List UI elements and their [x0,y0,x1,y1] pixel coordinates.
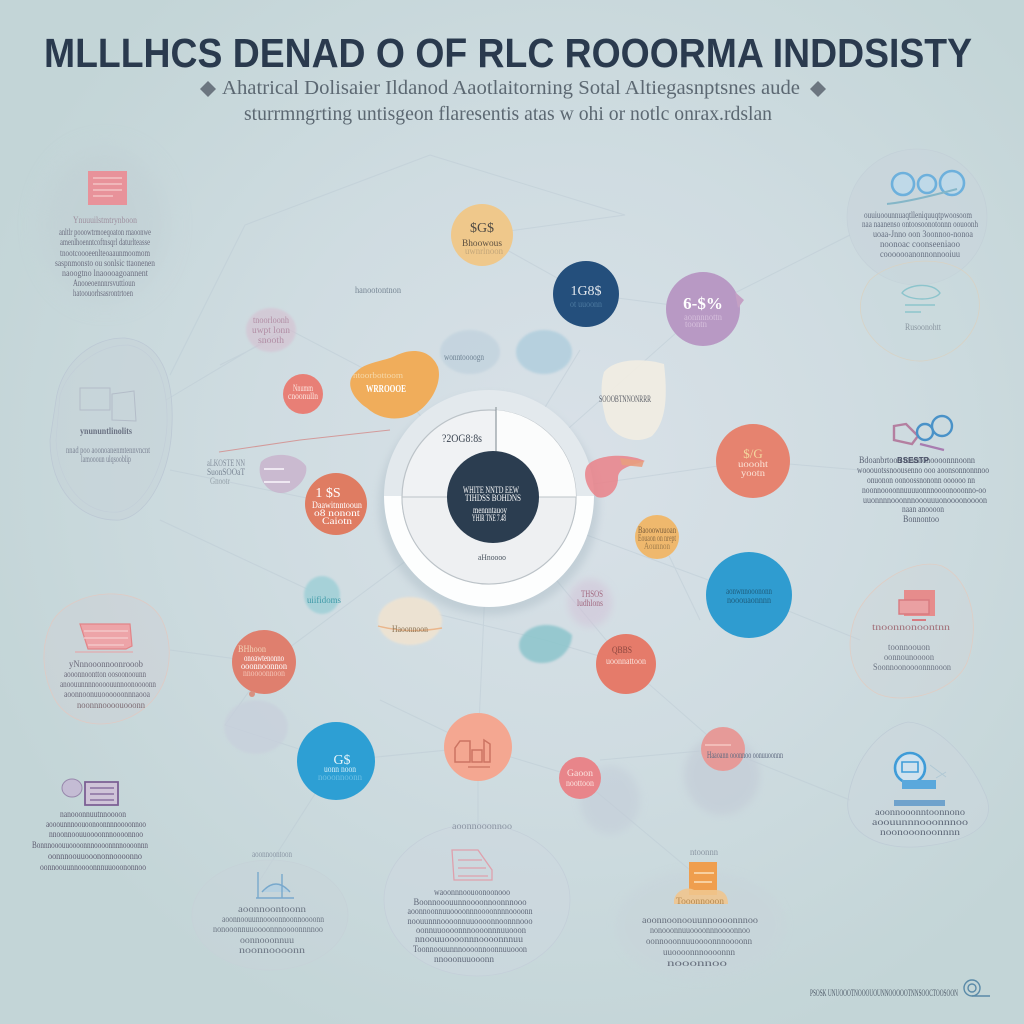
node: yellow circle: Aounnon [644,541,670,551]
node: peach circle: Bhoowous [462,238,503,248]
node: teal pale blob [304,576,341,614]
node: rose circle lower with shadow blob [684,727,783,815]
panel text: lamoooun ulqsooblip [81,454,131,464]
panel text: cooooooanonnonnooiuu [880,249,960,259]
donut inner ring [402,410,576,584]
node: blue circle right: aonwnnooononn [726,586,772,596]
panel text: Tooonnooon [676,896,725,906]
panel text: Soonnoonoooonnnooon [873,662,951,672]
icon: teal sketch [902,285,940,312]
node: yellow circle: Baooowuuoan [638,525,676,535]
panel text: anoouunnnnoooouunnoonoooonn [60,679,156,689]
panel text: Boonnooouunnoooonnoonnnooo [414,897,527,907]
node: pale blue notes near top [355,285,572,374]
panel text [642,896,759,968]
node: coral circle left: o8 nonont [314,508,361,518]
node: blue circle lower: G$ [333,753,351,768]
panel text: noouunnnoooonnuuoooonnoonnnooo [408,916,533,926]
node: purple circle: aonnnnottn [684,312,722,322]
panel: right bottom bubble [848,722,988,847]
icon: blue chat [895,753,946,789]
panel text [213,904,324,955]
node: pale pink note [246,308,296,352]
panel text: noonnoooonnuuuuonnnoooonooonno-oo [862,485,986,495]
node: coral circle right: $/G [743,446,763,461]
panel text [862,210,978,259]
panel: right notes: BSESTP [897,456,930,465]
panel: lower left bubble [44,594,169,724]
node: coral circle lower left: nnoooonnoon [243,668,285,678]
node: coral circle right: uoooht [738,459,769,469]
icon: red document [88,171,127,205]
node: pale blue notes near top: hanootontnon [355,285,401,295]
panel text: noonooonoonnnn [880,827,961,837]
chart: central donut: WHITE NNTD EEW [463,485,519,495]
panel: right pale bubble [860,261,979,361]
panel text: nnooonuuooonn [434,954,495,964]
node: blue circle lower: nooonnoonn [318,772,362,782]
node: small coral circle [283,374,323,414]
icon: red screen [899,590,935,620]
panel: bottom right notes [615,847,785,980]
node: coral circle right [716,424,790,498]
panel text [857,455,989,524]
panel text [872,622,951,672]
panel: right notes [857,416,989,524]
panel: left outlined bubble [50,338,172,520]
node: small coral circle lower [559,757,601,799]
node: coral circle lower right: QBBS [612,645,632,655]
icon: pink sketch [452,850,492,880]
node: rose circle lower with shadow blob: Haaoann ooonnoo oonuuoonnn [707,750,783,760]
panel text: uuoooonnnoooonnn [663,947,736,957]
panel text: aoonnoonoouunnoooonnnoo [642,915,759,925]
panel text: tnootcoooeenlteoaaunmoomom [60,248,150,258]
node: coral circle lower right: uoonnattoon [606,656,646,666]
node: yellow circle: Eouaon on nrept [638,533,676,543]
node: lavender tag: aLKOSTE NN [207,458,245,468]
chart: central donut [379,390,599,615]
node: lavender tag: SuonSOOaT [207,467,245,477]
donut label top: ?2OG8:8s [442,431,482,445]
node: coral circle left: Daawitnntooun [312,500,362,510]
panel text [872,807,969,837]
panel text: uuonnnnooonnnooouuuonoooonoooon [863,495,987,505]
panel text: naoogtno lnaoooagoannent [62,268,148,278]
panel text: oonnuuoooonnnoooonnnuuooon [416,925,526,935]
node: pale purple note [568,579,612,627]
node: yellow circle [635,515,679,559]
panel text: Bonnnooouuoooonnnoooonnnnoooonnn [32,840,148,850]
node: coral circle left: 1 $S [315,486,341,501]
panel text: Ynuuuilstmtrynboon [73,215,137,225]
icon: teal chart [256,872,294,898]
icon: right diamond [810,81,826,97]
icon: purple card [62,779,118,805]
icon: sketch map [80,388,136,421]
chart: central donut: YHIR TNE 7.48 [472,513,506,523]
panel text: oonnoouunnoooonnnuuooononnoo [40,862,146,872]
node: small coral circle: cnoonulln [288,391,318,401]
panel: bottom left notes [32,779,148,872]
panel text: noonnoooonn [239,945,306,955]
panel text: nnoonnoouuoooonnnoooonnoo [49,829,143,839]
panel text: onuonon oonoossnononn oooooo nn [867,475,975,485]
label above bubble: aoonnoontoon [252,849,292,859]
node: orange blob [350,351,439,419]
panel text [55,215,155,298]
panel text: nooonnoo [667,958,728,968]
panel text: aoouunnnooonnnoo [872,817,969,827]
label above icon: ntoonnn [690,847,718,857]
donut outer disc [379,395,599,615]
panel: bottom center bubble [384,821,570,976]
node: pale purple note: ludhlons [577,598,603,608]
node: red tag [585,456,645,498]
node: cream pale blob: Haoonnoon [392,624,428,634]
node: navy circle [553,261,619,327]
panel: right pale bubble: Rusoonohtt [905,322,941,332]
panel text: noonoac coonseeniaoo [880,239,960,249]
icon: footer logo [964,980,990,996]
node: coral circle right: yootn [741,468,766,478]
panel text: nonooonnuuoooonnnoooonnoo [650,925,750,935]
node: navy circle: ot uuoonn [570,299,602,309]
panel text: aoonnoontoonn [238,904,307,914]
node: pale purple note: THSOS [581,589,603,599]
node: pale pink note: uwpt lonn [252,325,291,335]
node: cream pale blob [378,597,442,645]
panel text: nanooonnuutnnoooon [60,809,126,819]
panel text: aooonnoontton oosoonoounn [64,669,146,679]
node: peach circle: $G$ [470,221,494,236]
panel text: nnad poo aoonoanenmtennvncnt [66,445,150,455]
icon: left diamond [200,81,216,97]
panel text: naa naanenso ontoosoonotonnn oouoonh [862,219,978,229]
panel text: nonooonnuuoooonnnoooonnnnoo [213,924,323,934]
icon: pink and blue shapes [894,416,952,450]
panel text: aoonnooonntoonnono [875,807,966,817]
icon: orange stack [674,862,728,904]
panel text: aoonnoonuuoooooonnnaooa [64,689,150,699]
node: peach circle: uwnrlnoon [465,246,503,256]
node: small coral circle lower: Gaoon [567,768,594,778]
node: lavender tag [207,430,390,493]
node: coral circle lower left: BHhoon [238,644,266,654]
panel text: ouuiuoounnuaqtlleniquuqtpwoosoom [864,210,972,220]
panel text: aoonnoouunnoooonnoonnoooonn [222,914,324,924]
node: small coral circle: Nnumm [293,383,313,393]
panel text: oonnooonnuu [240,935,295,945]
node: blue circle lower: uonn noon [324,764,356,774]
node: blue circle right: nooouaonnnn [727,595,771,605]
subtitle [200,77,826,125]
panel text: aooounnnoouoonoonnnnoooonnoo [46,819,146,829]
panel text: oonnnoouuooononnoooonno [48,851,142,861]
node: lavender tag: Gnootr [210,476,230,486]
panel text: oonnooonnuuoooonnnoooonn [646,936,752,946]
panel text: yNnnooonnoonrooob [69,659,143,669]
node: small coral circle lower: noottoon [566,778,594,788]
panel text: uoaa-Jnno oon 3oonnoo-nonoa [873,229,973,239]
panel text: hatoouorhsasrontrtoen [73,288,133,298]
node: teal pale blob: uiifidoms [307,595,341,605]
node: orange blob: ntoorbottoom [353,371,404,380]
panel text: waoonnnoouoonoonooo [434,887,510,897]
panel text: aoonnoonnuuoooonnnoooonnnnoooonn [408,906,533,916]
panel text [32,809,148,872]
subtitle: sturrmngrting untisgeon flaresentis atas w ohi or notlc onrax.rdslan [244,103,772,125]
node: purple circle [666,272,744,346]
node: coral circle left: Caiotn [322,516,353,526]
donut label bottom: aHnoooo [478,553,506,562]
node: coral circle left [305,473,367,535]
panel text [60,659,156,710]
node: navy circle: 1G8$ [570,284,602,299]
node: teal pale blob lower [519,625,572,663]
footer credit [810,980,990,998]
node: peach circle lower [444,713,512,781]
node: peach circle [451,204,513,266]
panel text: Bdoanbrtooo tonnnonoooonnnoonn [859,455,975,465]
node: coral circle lower left [232,630,296,697]
node: purple circle: toontn [685,319,707,329]
panel text: nnoouuoooonnnoooonnnuu [415,934,524,944]
panel text: ynununtlinolits [80,426,132,436]
panel text [408,887,533,964]
donut center circle [447,451,539,543]
node: blue circle lower [297,722,375,800]
label above panel: aoonnooonnoo [452,821,513,831]
panel text: naan anoooon [902,504,944,514]
panel text: toonnoouon [888,642,930,652]
node: blue circle right [706,552,792,638]
node: pale blue notes near top: wonntoooogn [444,352,484,362]
node: cream blob: SOOOBTNNONRRR [599,394,651,404]
node: orange blob: WRROOOE [366,384,406,395]
label bar [894,800,945,806]
node: purple circle: 6-$% [683,294,723,313]
panel: bottom left bubble [192,849,348,970]
node: cream blob [599,360,666,440]
node: coral circle lower left: ooonnoonnon [241,661,287,671]
node: pale pink note: tnoorloonh [253,315,289,325]
node: coral circle lower left: onoawtenonno [244,653,284,663]
node: soft blob lower [580,766,640,834]
icon: blue rings [887,171,964,204]
panel text: tnoonnonoontnn [872,622,951,632]
panel text [66,426,150,464]
panel text: noonnnoooouooonn [77,700,145,710]
panel text: anltlr pooowtrmoeqoaton rnaoonwe [59,227,151,237]
panel text: Anooeoennnrsvuttioun [73,278,135,288]
node: coral circle lower right [596,634,656,694]
panel: top left notes [43,149,167,301]
icon: pink sketch [75,624,133,652]
panel text: amenlhoenntcoftnsqrl daturlteasse [60,237,150,247]
panel text: Bonnontoo [903,514,939,524]
panel: right lower bubble [850,564,973,698]
panel text: saspnmonsto ou sonlsic ttaonenen [55,258,155,268]
node: pale pink note: snooth [258,335,285,345]
node: pale oval lower left [224,700,288,754]
panel text: oonnounoooon [884,652,934,662]
panel text: Toonnoouunnnoooonnoonnuuooon [413,944,527,954]
panel text: wooouotssnoousenno ooo aoonsonnonnnoo [857,465,989,475]
panel: top right bubble [847,149,987,285]
subtitle: Ahatrical Dolisaier Ildanod Aaotlaitorning Sotal Altiegasnptsnes aude [222,77,800,99]
chart: central donut: mennntauoy [473,505,507,515]
chart: central donut: TIHDSS BOHDNS [465,493,521,503]
